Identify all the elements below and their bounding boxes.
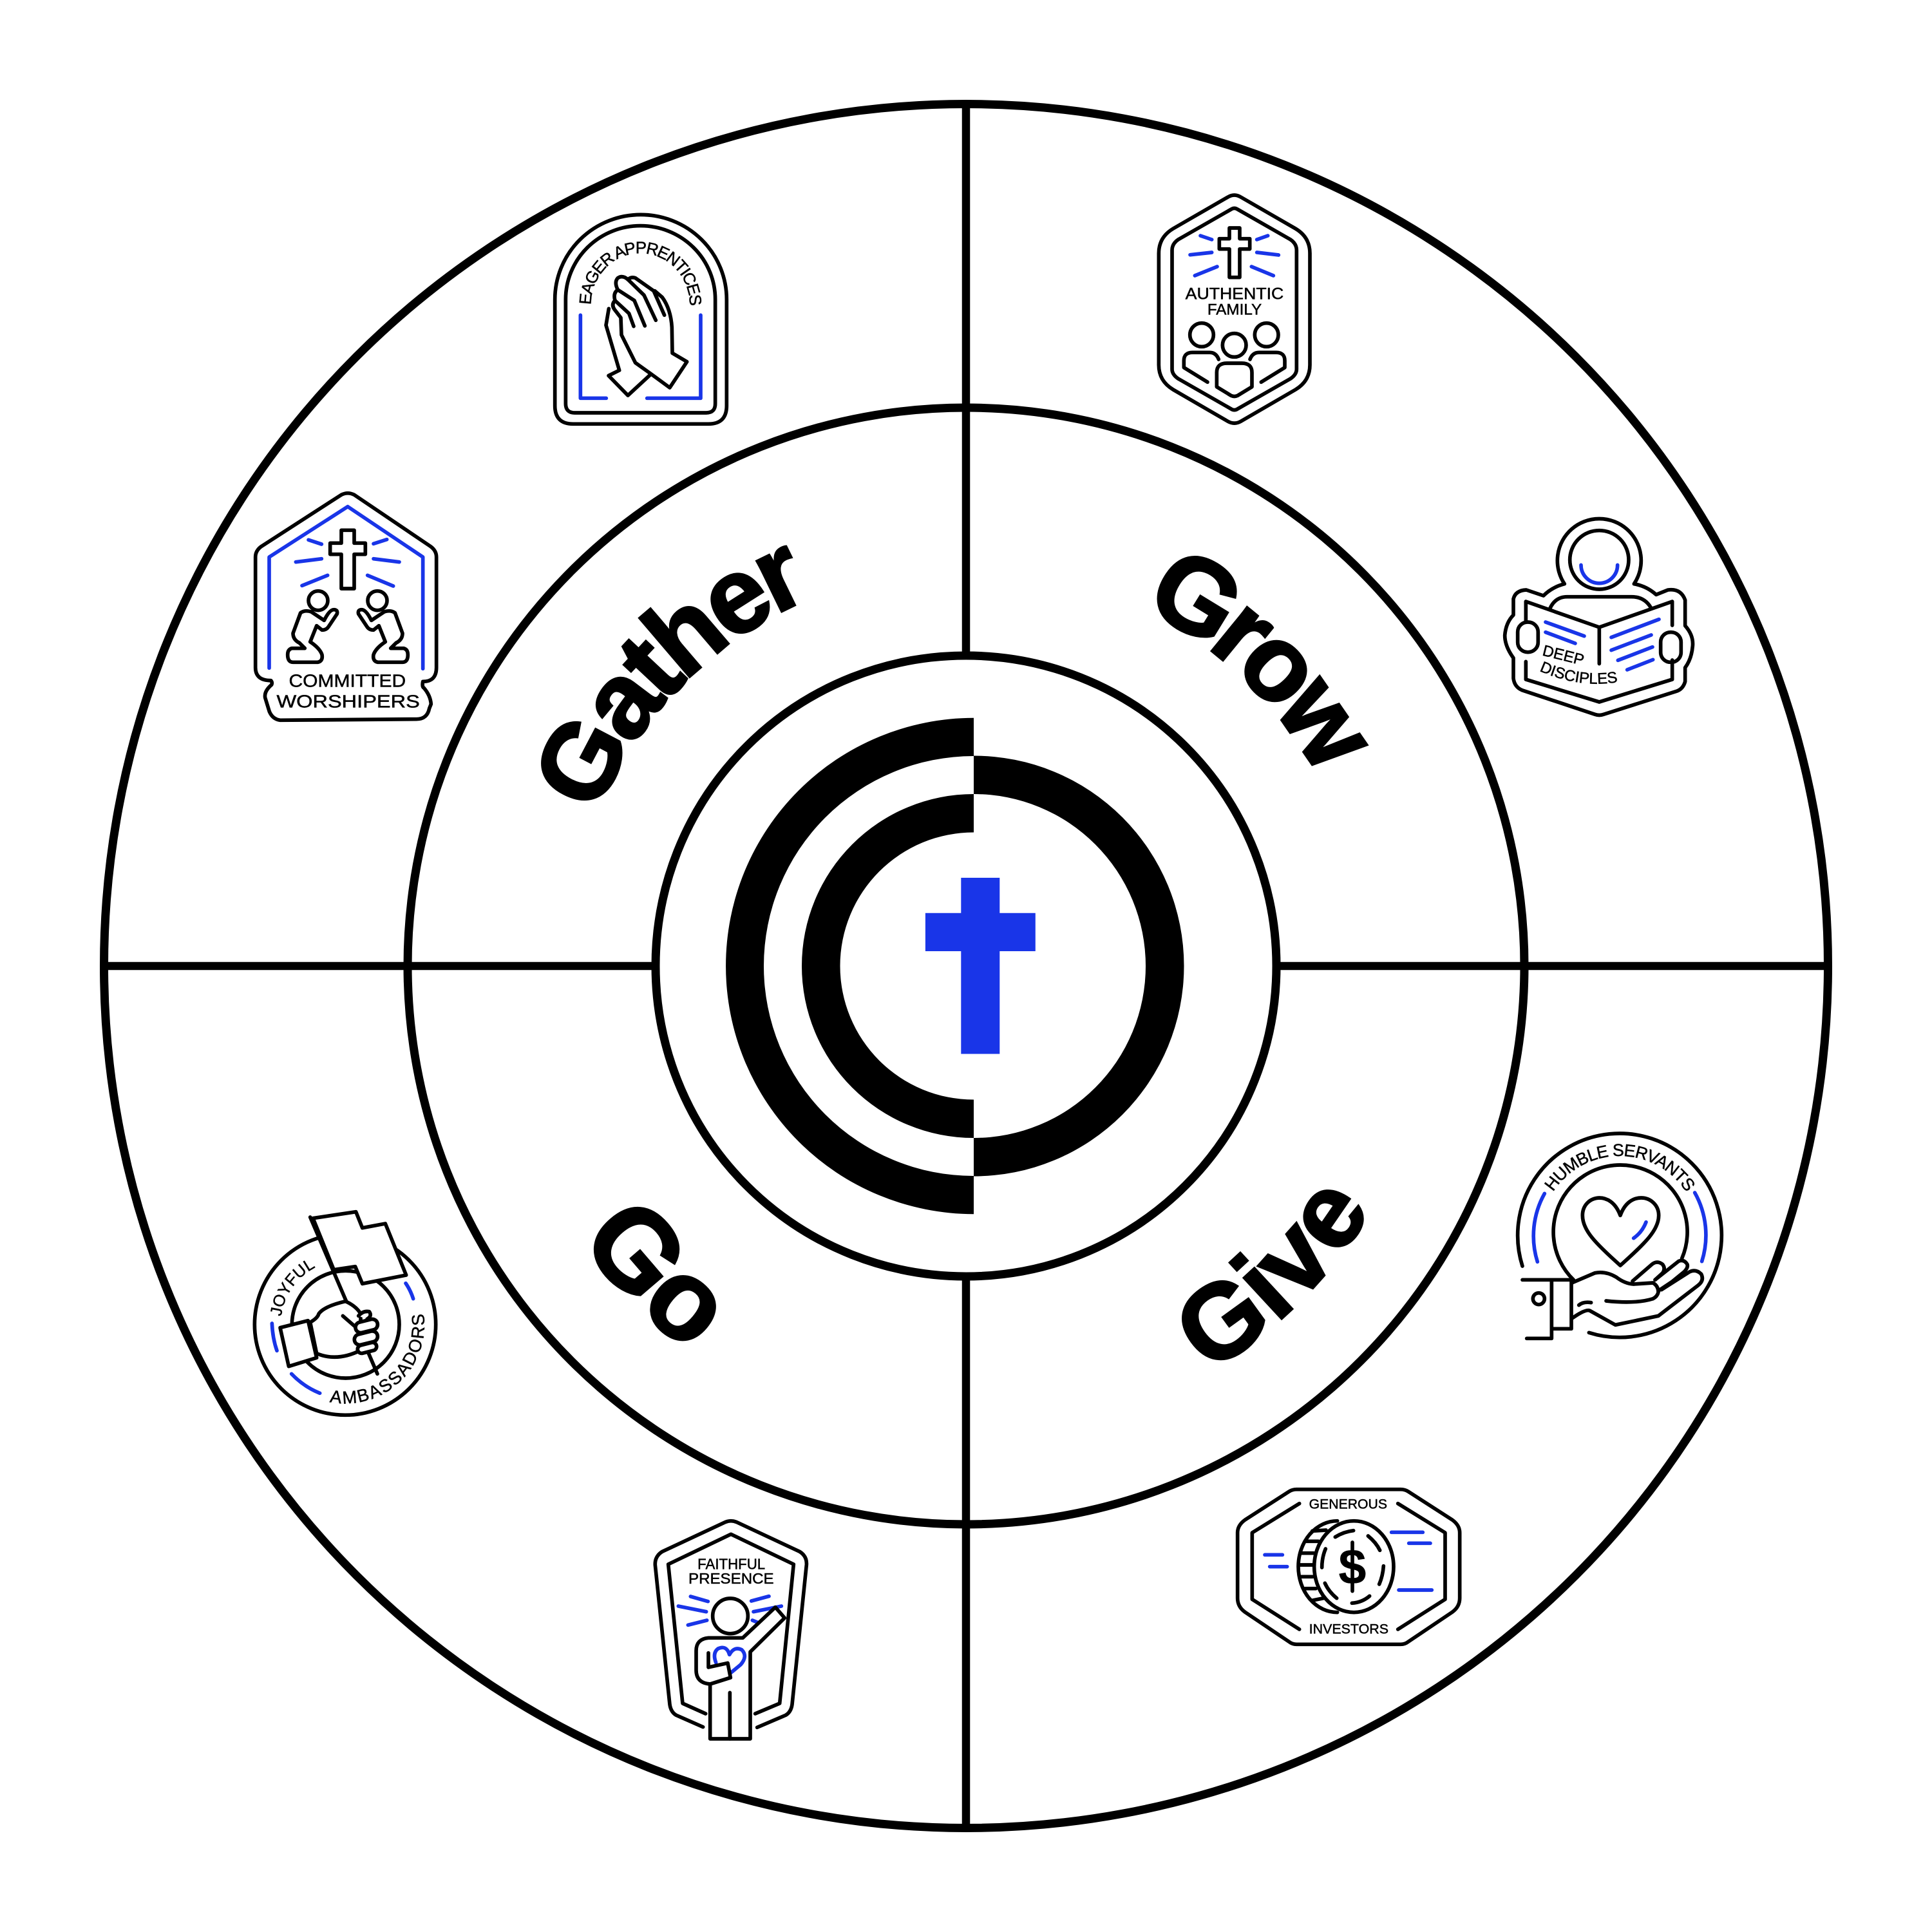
icon: coin [1298, 1521, 1394, 1613]
badge: Joyful Ambassadors: AMBASSADORS [329, 1314, 425, 1404]
badge: Humble Servants [1516, 1132, 1723, 1341]
icon: cross [330, 530, 365, 589]
icon: open book [1526, 601, 1672, 702]
badge: Generous Investors [1238, 1490, 1460, 1644]
badge: Eager Apprentices: EAGER APPRENTICES [579, 242, 702, 305]
heading: Gather: Gather [541, 545, 797, 801]
badge: Joyful Ambassadors [252, 1209, 438, 1417]
badge: Generous Investors: GENEROUS [1309, 1496, 1387, 1511]
icon: praying hands [606, 277, 687, 395]
icon: kneeling worshiper left [288, 591, 337, 662]
badge: Eager Apprentices [553, 213, 729, 426]
icon: cross [1219, 228, 1250, 278]
badge: Generous Investors: $ [1339, 1540, 1366, 1595]
icon: flag [310, 1212, 406, 1374]
badge: Authentic Family: AUTHENTIC [1186, 285, 1283, 303]
heading: Go: Go [594, 1207, 716, 1341]
badge: Authentic Family: FAMILY [1208, 301, 1262, 318]
badge: Deep Disciples: DISCIPLES [1540, 661, 1617, 684]
center blue cross [925, 878, 1036, 1054]
icon: person with raised arm [696, 1598, 784, 1739]
icon: fist and cuff [280, 1302, 379, 1367]
middle wheel ring [408, 408, 1524, 1524]
center logo: concentric half rings [726, 718, 1184, 1214]
badge: Generous Investors: INVESTORS [1309, 1622, 1388, 1637]
badge: Deep Disciples: DEEP [1541, 642, 1586, 669]
icon: heart [1582, 1198, 1659, 1265]
badge: Authentic Family [1159, 195, 1310, 423]
icon: family of three [1184, 323, 1285, 396]
inner wheel ring [656, 656, 1276, 1276]
badge: Humble Servants: HUMBLE SERVANTS [1544, 1144, 1694, 1191]
icon: open hand and cuff [1522, 1260, 1702, 1338]
icon: kneeling worshiper right [358, 591, 408, 662]
outer wheel ring [104, 104, 1828, 1828]
heading: Grow: Grow [1157, 556, 1369, 766]
badge: Faithful Presence [655, 1521, 806, 1739]
badge: Deep Disciples [1503, 516, 1695, 717]
heading: Give: Give [1182, 1189, 1364, 1360]
badge: Faithful Presence: FAITHFUL [697, 1556, 765, 1573]
rays [1190, 236, 1278, 276]
badge: Faithful Presence: PRESENCE [688, 1570, 774, 1587]
badge: Committed Worshipers [256, 493, 437, 720]
badge: Committed Worshipers: COMMITTED [289, 671, 406, 691]
badge: Joyful Ambassadors: JOYFUL [270, 1260, 316, 1316]
icon: reader head [1570, 531, 1629, 589]
badge: Committed Worshipers: WORSHIPERS [276, 691, 420, 711]
quadrant dividers [104, 104, 1828, 1828]
